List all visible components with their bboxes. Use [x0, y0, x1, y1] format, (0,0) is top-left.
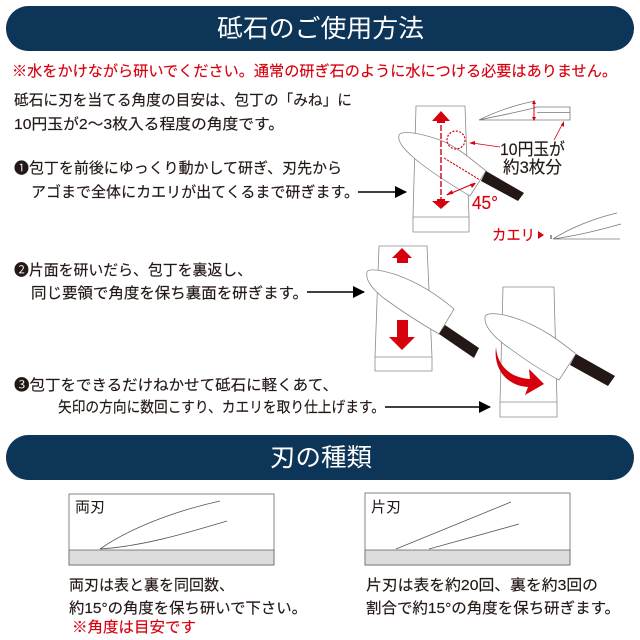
text: double-edged description: 約15°の角度を保ち研いで下さい。 — [69, 600, 307, 617]
panel: double-edged blade diagram — [69, 494, 274, 565]
text: single-edged description: 割合で約15°の角度を保ち研ぎます。 — [366, 600, 620, 617]
step 1 text: ❶包丁を前後にゆっくり動かして研ぎ、刃先から — [14, 160, 342, 177]
step 3 text: 矢印の方向に数回こすり、カエリを取り仕上げます。 — [58, 399, 385, 416]
text: single-edged description — [366, 577, 620, 617]
step 1 text: アゴまで全体にカエリが出てくるまで研ぎます。 — [31, 183, 359, 201]
heading bar: how to use — [6, 6, 634, 51]
label: 10 yen coins: 10円玉が — [500, 140, 565, 159]
step 2 text: 同じ要領で角度を保ち裏面を研ぎます。 — [31, 285, 308, 302]
panel: single-edged blade diagram: 片刃 — [371, 499, 401, 516]
label: 10 yen coins: 約3枚分 — [503, 158, 562, 177]
panel: double-edged blade diagram: 両刃 — [75, 499, 105, 516]
step 1 text — [14, 160, 359, 201]
intro text: 10円玉が2〜3枚入る程度の角度です。 — [14, 116, 284, 133]
arrow: step 2 — [307, 291, 364, 293]
illustration: step 3 knife on stone — [485, 287, 615, 417]
heading bar: how to use: 砥石のご使用方法 — [217, 15, 424, 43]
intro text — [14, 92, 352, 133]
heading bar: blade types — [6, 435, 634, 480]
text: double-edged description — [69, 577, 307, 636]
label: burr with diagram — [492, 213, 621, 244]
text: double-edged description: 両刃は表と裏を同回数、 — [69, 577, 234, 594]
heading bar: blade types: 刃の種類 — [270, 444, 372, 472]
illustration: blade cross-section with coins — [479, 100, 570, 121]
illustration: step 2 knife on stone — [367, 246, 479, 371]
red warning note: ※水をかけながら研いでください。通常の研ぎ石のように水につける必要はありません。 — [12, 63, 617, 80]
panel: single-edged blade diagram — [365, 493, 570, 565]
label: 45 degrees: 45° — [472, 193, 498, 213]
text: double-edged description: ※角度は目安です — [72, 619, 196, 636]
step 2 text: ❷片面を研いだら、包丁を裏返し、 — [14, 262, 252, 279]
label: burr with diagram: カエリ — [492, 227, 535, 244]
step 3 text: ❸包丁をできるだけねかせて砥石に軽くあて、 — [14, 377, 338, 394]
arrow: step 1 — [358, 191, 406, 193]
step 3 text — [14, 377, 385, 416]
illustration: step 1 knife on stone — [399, 106, 564, 232]
intro text: 砥石に刃を当てる角度の目安は、包丁の「みね」に — [14, 92, 352, 109]
step 2 text — [14, 262, 308, 302]
text: single-edged description: 片刃は表を約20回、裏を約3回の — [366, 577, 598, 594]
label: 10 yen coins — [500, 140, 565, 177]
arrow: step 3 — [385, 406, 490, 408]
